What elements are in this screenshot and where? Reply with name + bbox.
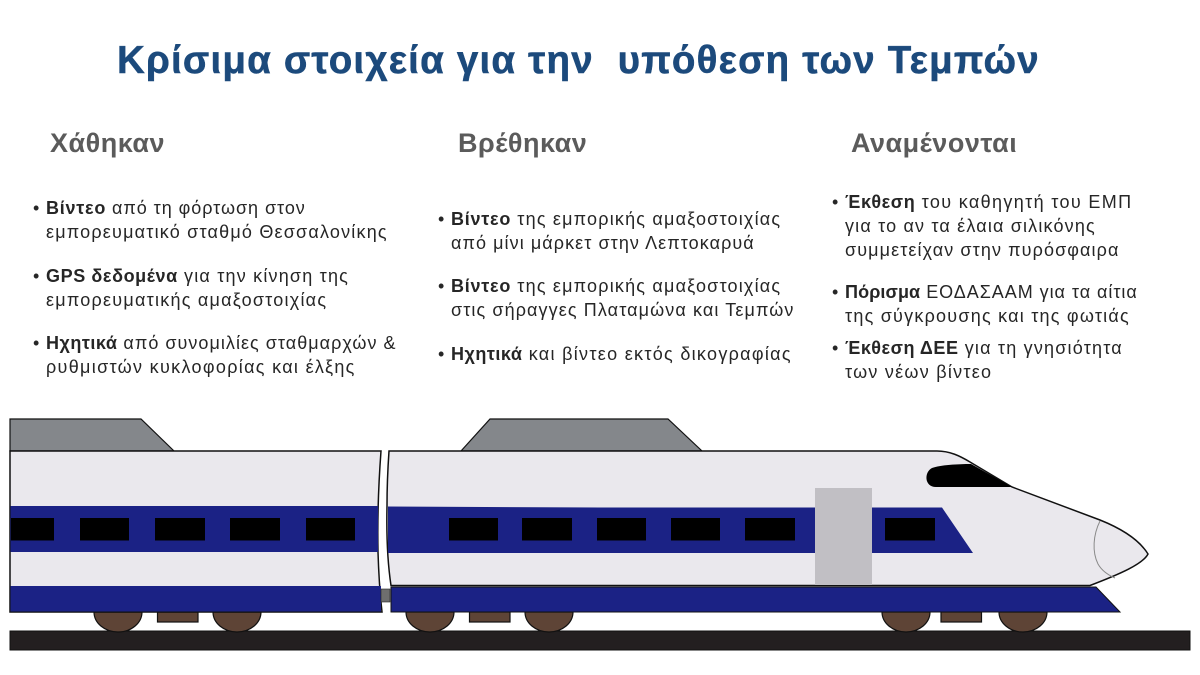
- front car window band: [388, 506, 973, 553]
- front car windows: [449, 518, 935, 540]
- text block: lost item 2: εμπορευματικής αμαξοστοιχίας: [46, 290, 327, 310]
- text block: lost item 3: [33, 333, 397, 377]
- text block: expected item 1: για το αν τα έλαια σιλικόνης: [845, 216, 1096, 236]
- text block: found item 1: [438, 209, 781, 253]
- heading: found: Βρέθηκαν: [458, 128, 587, 158]
- text: •: [438, 276, 444, 296]
- coupler: [381, 589, 390, 602]
- text block: expected item 3: των νέων βίντεο: [845, 362, 992, 382]
- door: [815, 488, 872, 585]
- text block: found item 3: Ηχητικά και βίντεο εκτός δικογραφίας: [451, 344, 792, 364]
- wheels and undercarriage boxes: [94, 612, 1047, 632]
- text block: lost item 3: ρυθμιστών κυκλοφορίας και έλξης: [46, 357, 356, 377]
- text block: found item 1: από μίνι μάρκετ στην Λεπτοκαρυά: [451, 233, 755, 253]
- rear car: [10, 419, 382, 612]
- text block: found item 1: Βίντεο της εμπορικής αμαξοστοιχίας: [451, 209, 781, 229]
- front car body and nose: [387, 451, 1148, 586]
- text: •: [33, 266, 39, 286]
- rear car windows: [11, 518, 355, 540]
- text block: lost item 1: Βίντεο από τη φόρτωση στον: [46, 198, 306, 218]
- nose seam: [1094, 521, 1115, 578]
- text block: lost item 1: εμπορευματικό σταθμό Θεσσαλονίκης: [46, 222, 388, 242]
- text: •: [832, 192, 838, 212]
- text block: expected item 3: Έκθεση ΔΕΕ για τη γνησιότητα: [845, 338, 1123, 358]
- text block: expected item 2: Πόρισμα ΕΟΔΑΣΑΑΜ για τα αίτια: [845, 282, 1138, 302]
- text: •: [438, 344, 444, 364]
- front car: [387, 419, 1148, 612]
- text block: expected item 2: [832, 282, 1138, 326]
- heading: expected: Αναμένονται: [851, 128, 1017, 158]
- text block: found item 2: στις σήραγγες Πλαταμώνα και Τεμπών: [451, 300, 794, 320]
- heading: lost: Χάθηκαν: [50, 128, 165, 158]
- rear car body: [10, 451, 382, 612]
- text block: expected item 1: Έκθεση του καθηγητή του ΕΜΠ: [845, 192, 1132, 212]
- text block: lost item 2: [33, 266, 349, 310]
- text block: expected item 1: [832, 192, 1132, 260]
- title: Κρίσιμα στοιχεία για την υπόθεση των Τεμπών: [117, 39, 1040, 82]
- rail track: [10, 631, 1190, 650]
- text: •: [33, 333, 39, 353]
- text block: expected item 2: της σύγκρουσης και της φωτιάς: [845, 306, 1130, 326]
- text block: lost item 3: Ηχητικά από συνομιλίες σταθμαρχών &: [46, 333, 397, 353]
- front car skirt: [391, 587, 1120, 612]
- text: •: [438, 209, 444, 229]
- text block: lost item 2: GPS δεδομένα για την κίνηση της: [46, 266, 349, 286]
- text block: expected item 1: συμμετείχαν στην πυρόσφαιρα: [845, 240, 1120, 260]
- windshield: [926, 464, 1012, 487]
- rear car window band: [10, 506, 378, 552]
- text: •: [33, 198, 39, 218]
- rear car skirt: [10, 586, 381, 612]
- text block: found item 2: [438, 276, 794, 320]
- text block: expected item 3: [832, 338, 1123, 382]
- text block: found item 2: Βίντεο της εμπορικής αμαξοστοιχίας: [451, 276, 781, 296]
- text: •: [832, 338, 838, 358]
- front pantograph housing: [461, 419, 702, 451]
- text block: lost item 1: [33, 198, 388, 242]
- text: •: [832, 282, 838, 302]
- rear pantograph housing: [10, 419, 174, 451]
